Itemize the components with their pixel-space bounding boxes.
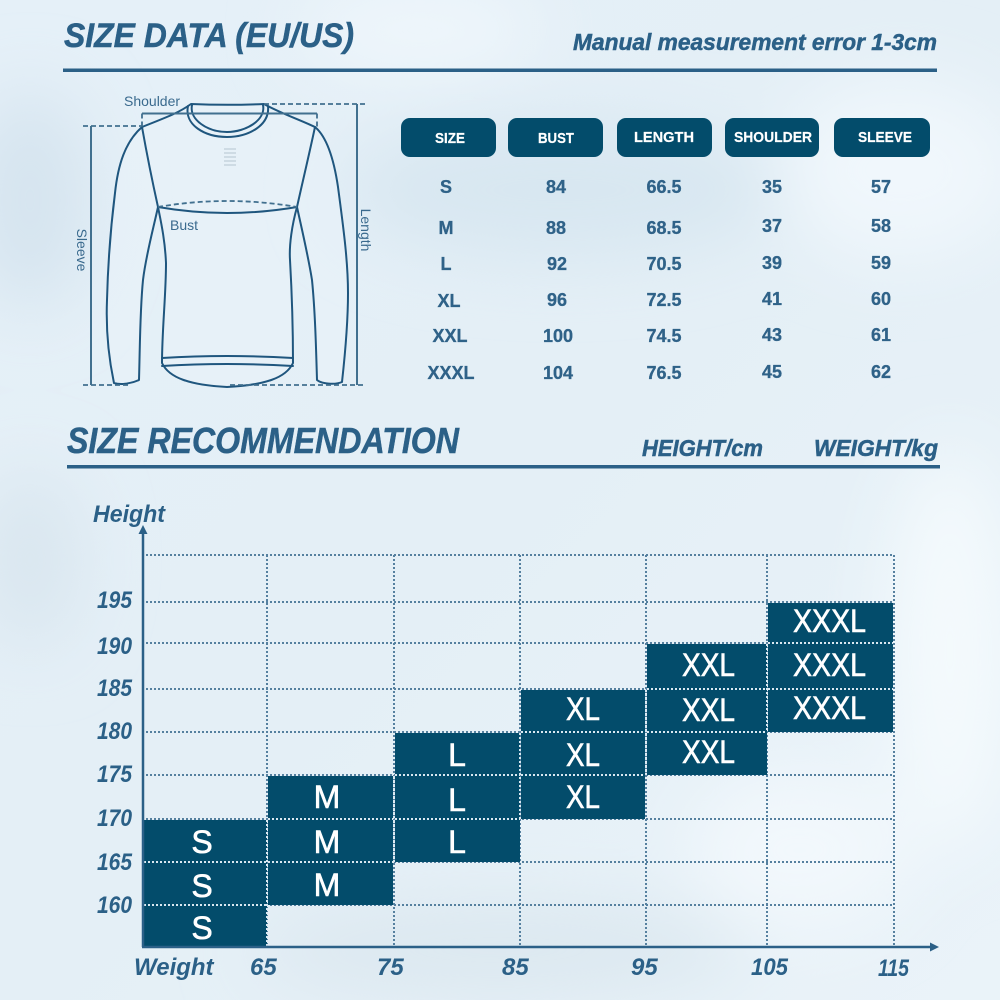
cell labels: XXXL: XXXL bbox=[793, 647, 866, 683]
cell labels: M: M bbox=[314, 867, 340, 903]
grid bbox=[146, 555, 894, 945]
weight axis labels: 65 bbox=[250, 954, 277, 981]
height axis labels: 170 bbox=[97, 805, 133, 832]
axis title: height: Height bbox=[93, 501, 166, 528]
shirt diagram bbox=[74, 93, 374, 387]
column: sleeve: 59 bbox=[871, 253, 891, 273]
column: sleeve: 57 bbox=[871, 177, 891, 197]
column: sleeve: 60 bbox=[871, 289, 891, 309]
column: bust: 96 bbox=[547, 290, 567, 310]
weight axis labels: 115 bbox=[878, 955, 910, 982]
column: length: 68.5 bbox=[646, 218, 682, 238]
height axis labels bbox=[97, 587, 133, 919]
dotted lines over blocks bbox=[144, 643, 893, 947]
table header bbox=[401, 118, 930, 157]
height axis labels: 175 bbox=[97, 761, 133, 788]
column: shoulder: 41 bbox=[762, 289, 782, 309]
column: shoulder: 43 bbox=[762, 325, 782, 345]
column: sleeve: 62 bbox=[871, 362, 891, 382]
table header: SLEEVE bbox=[858, 129, 912, 146]
column: shoulder: 39 bbox=[762, 253, 782, 273]
weight axis labels: 75 bbox=[377, 954, 404, 981]
label: shoulder: Shoulder bbox=[124, 93, 180, 109]
bust measure bbox=[158, 201, 297, 213]
shoulder measure bbox=[142, 114, 317, 127]
weight axis labels: 105 bbox=[751, 954, 789, 981]
height axis labels: 190 bbox=[97, 633, 133, 660]
cell labels: S: S bbox=[191, 910, 213, 946]
axis title: weight: Weight bbox=[134, 954, 215, 981]
length measure bbox=[230, 104, 365, 385]
height axis labels: 165 bbox=[97, 849, 133, 876]
height axis labels: 195 bbox=[97, 587, 133, 614]
cell labels: L: L bbox=[448, 824, 466, 860]
cell labels: L: L bbox=[448, 737, 466, 773]
column: size: XL bbox=[437, 291, 461, 311]
cell labels: XXL bbox=[682, 647, 735, 770]
column: size: XXXL bbox=[427, 363, 475, 383]
heading: size recommendation bbox=[67, 420, 938, 461]
column: length: 76.5 bbox=[646, 363, 682, 383]
heading: size data: SIZE DATA (EU/US) bbox=[64, 17, 354, 55]
weight axis labels bbox=[250, 954, 910, 982]
cell labels: L: L bbox=[448, 782, 466, 818]
axis arrows bbox=[138, 525, 939, 952]
cell labels: XXL: XXL bbox=[682, 647, 735, 683]
heading: size data bbox=[64, 17, 937, 55]
sleeve measure bbox=[83, 126, 142, 385]
column: bust: 92 bbox=[547, 254, 567, 274]
column: sleeve bbox=[871, 177, 891, 382]
column: size bbox=[427, 177, 475, 383]
column: length: 74.5 bbox=[646, 326, 682, 346]
cell labels: XXXL: XXXL bbox=[793, 690, 866, 726]
column: size: XXL bbox=[432, 326, 468, 346]
table header: SIZE bbox=[435, 130, 465, 147]
cell labels: S: S bbox=[191, 824, 213, 860]
height axis labels: 180 bbox=[97, 718, 133, 745]
column: bust: 100 bbox=[543, 326, 573, 346]
table header: SHOULDER bbox=[734, 129, 812, 146]
cell labels: S bbox=[191, 824, 213, 946]
column: length: 70.5 bbox=[646, 254, 682, 274]
cell labels: XXXL: XXXL bbox=[793, 603, 866, 639]
column: bust: 88 bbox=[546, 218, 566, 238]
cell labels: S: S bbox=[191, 868, 213, 904]
label: sleeve: Sleeve bbox=[74, 229, 90, 272]
cell labels: XXL: XXL bbox=[682, 734, 735, 770]
weight axis labels: 85 bbox=[502, 954, 529, 981]
label: length: Length bbox=[358, 209, 374, 251]
cell labels: XL: XL bbox=[566, 779, 600, 815]
column: shoulder: 37 bbox=[762, 216, 782, 236]
table header: BUST bbox=[538, 130, 574, 147]
cell labels: M: M bbox=[314, 779, 340, 815]
label: height/cm: HEIGHT/cm bbox=[642, 435, 763, 461]
icon: long sleeve shirt outline bbox=[107, 104, 348, 387]
size chart bbox=[93, 501, 939, 982]
heading: size recommendation: SIZE RECOMMENDATION bbox=[67, 420, 460, 461]
column: sleeve: 61 bbox=[871, 325, 891, 345]
column: size: M bbox=[438, 218, 454, 238]
column: size: S bbox=[440, 177, 452, 197]
cell labels: L bbox=[448, 737, 466, 860]
cell labels: XL: XL bbox=[566, 691, 600, 727]
label: bust: Bust bbox=[170, 217, 198, 233]
table header: LENGTH bbox=[634, 129, 694, 146]
cell labels: XL: XL bbox=[566, 737, 600, 773]
column: bust bbox=[543, 177, 573, 383]
column: bust: 84 bbox=[546, 177, 566, 197]
label: weight/kg: WEIGHT/kg bbox=[814, 435, 938, 461]
cell labels: M: M bbox=[314, 824, 340, 860]
column: sleeve: 58 bbox=[871, 216, 891, 236]
column: shoulder: 45 bbox=[762, 362, 782, 382]
height axis labels: 160 bbox=[97, 892, 133, 919]
cell labels: M bbox=[314, 779, 340, 903]
column: shoulder: 35 bbox=[762, 177, 782, 197]
filled size blocks bbox=[144, 603, 893, 947]
cell labels: XXL: XXL bbox=[682, 692, 735, 728]
height axis labels: 185 bbox=[97, 675, 133, 702]
cell labels: XL bbox=[566, 691, 600, 815]
note: measurement error: Manual measurement error 1-3cm bbox=[573, 29, 937, 55]
weight axis labels: 95 bbox=[631, 954, 658, 981]
column: shoulder bbox=[762, 177, 782, 382]
size table bbox=[401, 118, 930, 383]
column: size: L bbox=[440, 254, 452, 274]
column: length bbox=[646, 177, 682, 383]
column: length: 72.5 bbox=[646, 290, 682, 310]
column: bust: 104 bbox=[543, 363, 573, 383]
column: length: 66.5 bbox=[646, 177, 682, 197]
cell labels: XXXL bbox=[793, 603, 866, 726]
